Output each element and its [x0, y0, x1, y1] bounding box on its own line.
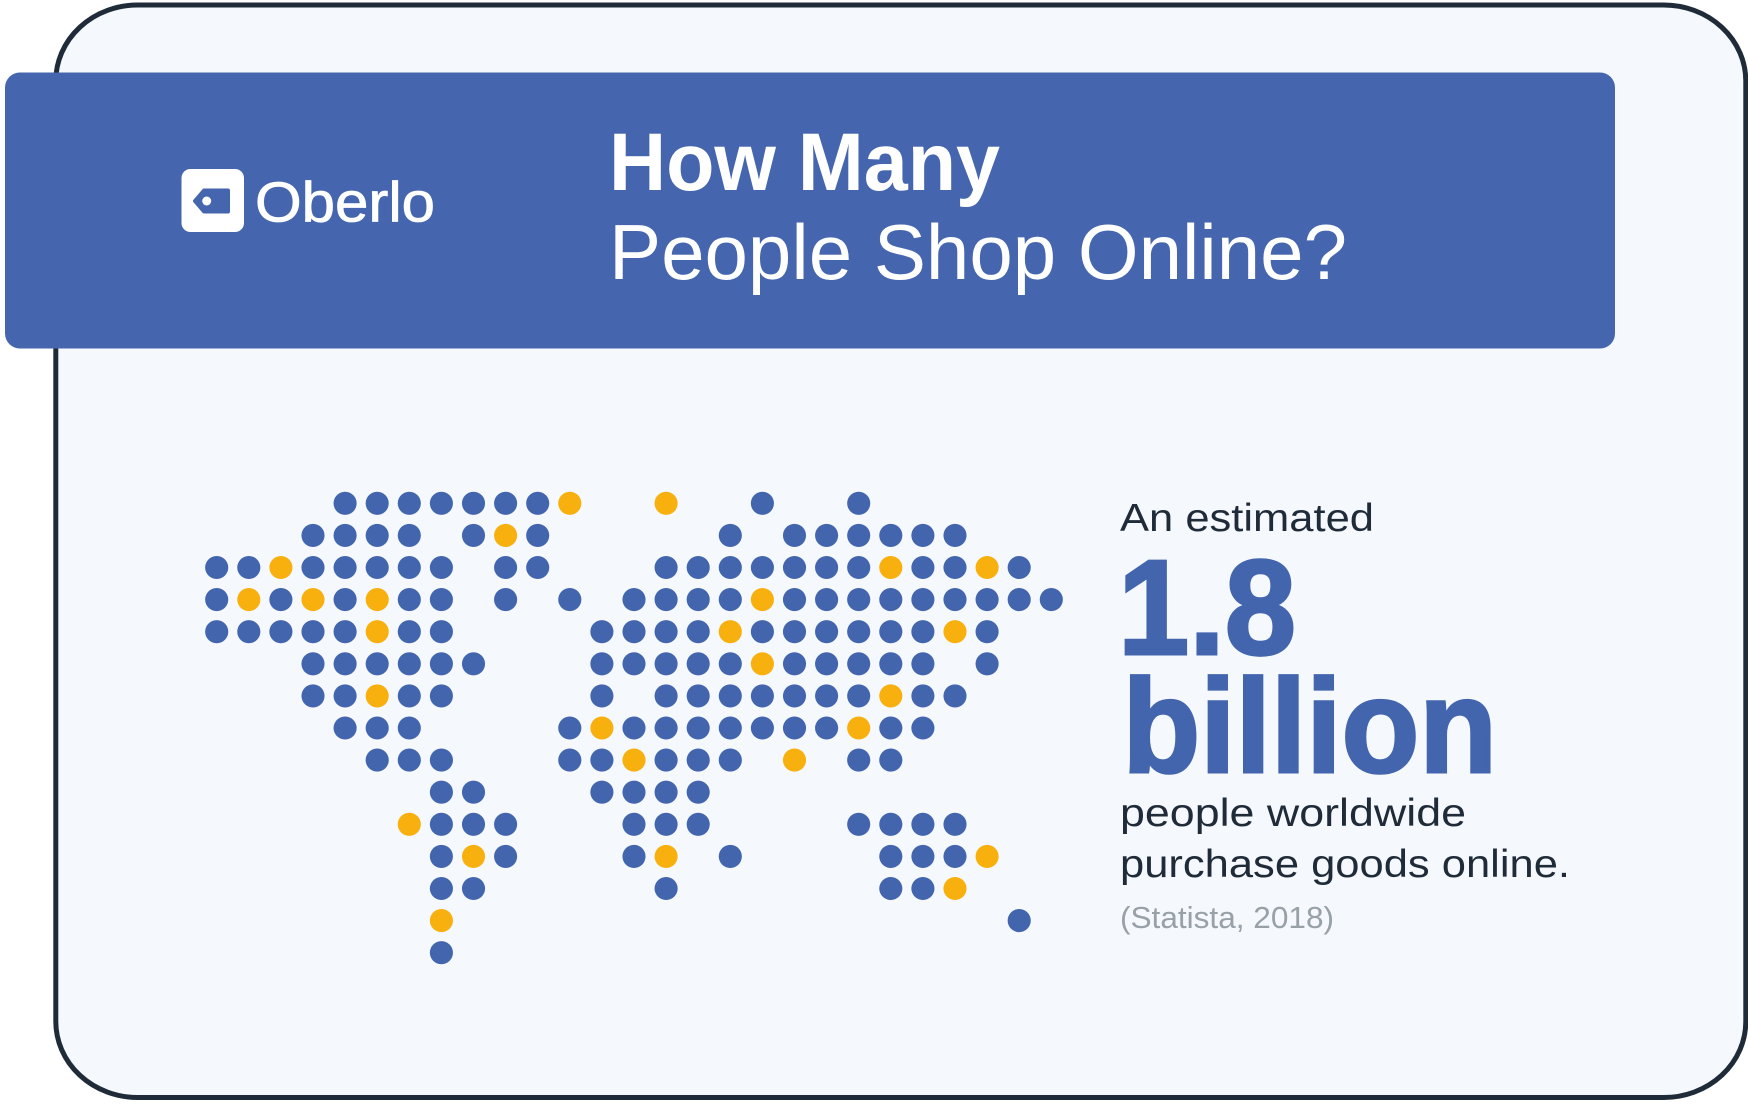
title line 1: How Many: [609, 117, 1000, 208]
map dots: Oceania: [859, 824, 1020, 921]
body line 2: purchase goods online.: [1120, 843, 1570, 886]
title line 2: People Shop Online?: [609, 208, 1347, 296]
icon: price tag in white rounded square: [182, 169, 244, 232]
dot-matrix world map: [217, 503, 1052, 953]
intro text: An estimated: [1120, 497, 1374, 540]
big number: 1.8: 1.8: [1118, 532, 1296, 683]
body line 1: people worldwide: [1120, 792, 1466, 835]
statistic text block: [1118, 497, 1570, 935]
map dots: North America and Greenland: [217, 503, 570, 760]
map dots: South America: [409, 792, 506, 953]
panel: header banner: [5, 72, 1615, 348]
logo: Oberlo: [182, 169, 435, 234]
map dots: Europe, Asia and Africa: [570, 503, 1052, 888]
source citation: (Statista, 2018): [1120, 900, 1334, 935]
logo wordmark: Oberlo: [255, 170, 435, 234]
title: [609, 117, 1347, 296]
big word: billion: billion: [1122, 653, 1497, 801]
